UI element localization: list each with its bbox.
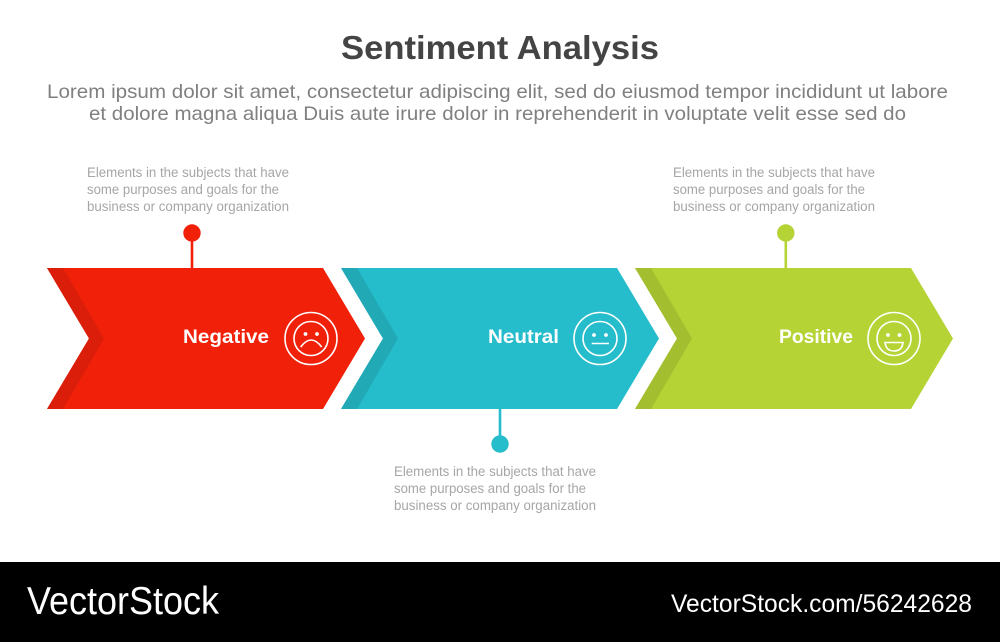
icon: happy face — [868, 312, 920, 364]
title: Sentiment Analysis — [341, 29, 659, 66]
arrow: positive chevron — [635, 268, 953, 409]
text block: neutral: some purposes and goals for the — [394, 481, 586, 496]
text block: neutral — [394, 464, 596, 513]
connector pin: negative — [183, 224, 201, 268]
text block: neutral: business or company organization — [394, 498, 596, 513]
connector pin: positive — [777, 224, 794, 268]
footer bar — [0, 562, 1000, 642]
connector pin: neutral — [491, 409, 509, 453]
footer brand: VectorStock — [27, 580, 219, 623]
arrow: neutral chevron — [341, 268, 659, 409]
subtitle text: Lorem ipsum dolor sit amet, consectetur adipiscing elit, sed do eiusmod tempor incididunt ut labore — [47, 81, 948, 103]
text block: positive: business or company organization — [673, 199, 875, 214]
label: positive: Positive — [779, 327, 853, 348]
footer url: VectorStock.com/56242628 — [671, 590, 972, 618]
arrow: negative chevron — [47, 268, 365, 409]
text block: neutral: Elements in the subjects that have — [394, 464, 596, 479]
chevron shade: positive — [635, 268, 692, 409]
label: neutral: Neutral — [488, 327, 559, 348]
text block: negative: Elements in the subjects that have — [87, 165, 289, 180]
chevron shade: neutral — [341, 268, 398, 409]
text block: negative: business or company organization — [87, 199, 289, 214]
text block: negative: some purposes and goals for the — [87, 182, 279, 197]
panel: positive — [635, 165, 953, 409]
subtitle text — [47, 81, 948, 125]
text block: positive: Elements in the subjects that have — [673, 165, 875, 180]
chevron shade: negative — [47, 268, 104, 409]
label: negative: Negative — [183, 327, 269, 348]
panel: neutral — [341, 268, 659, 513]
icon: sad face — [285, 312, 337, 364]
icon: neutral face — [574, 312, 626, 364]
subtitle text: et dolore magna aliqua Duis aute irure dolor in reprehenderit in voluptate velit esse sed do — [89, 103, 906, 125]
text block: positive — [673, 165, 875, 214]
panel: negative — [47, 165, 365, 409]
text block: negative — [87, 165, 289, 214]
text block: positive: some purposes and goals for the — [673, 182, 865, 197]
